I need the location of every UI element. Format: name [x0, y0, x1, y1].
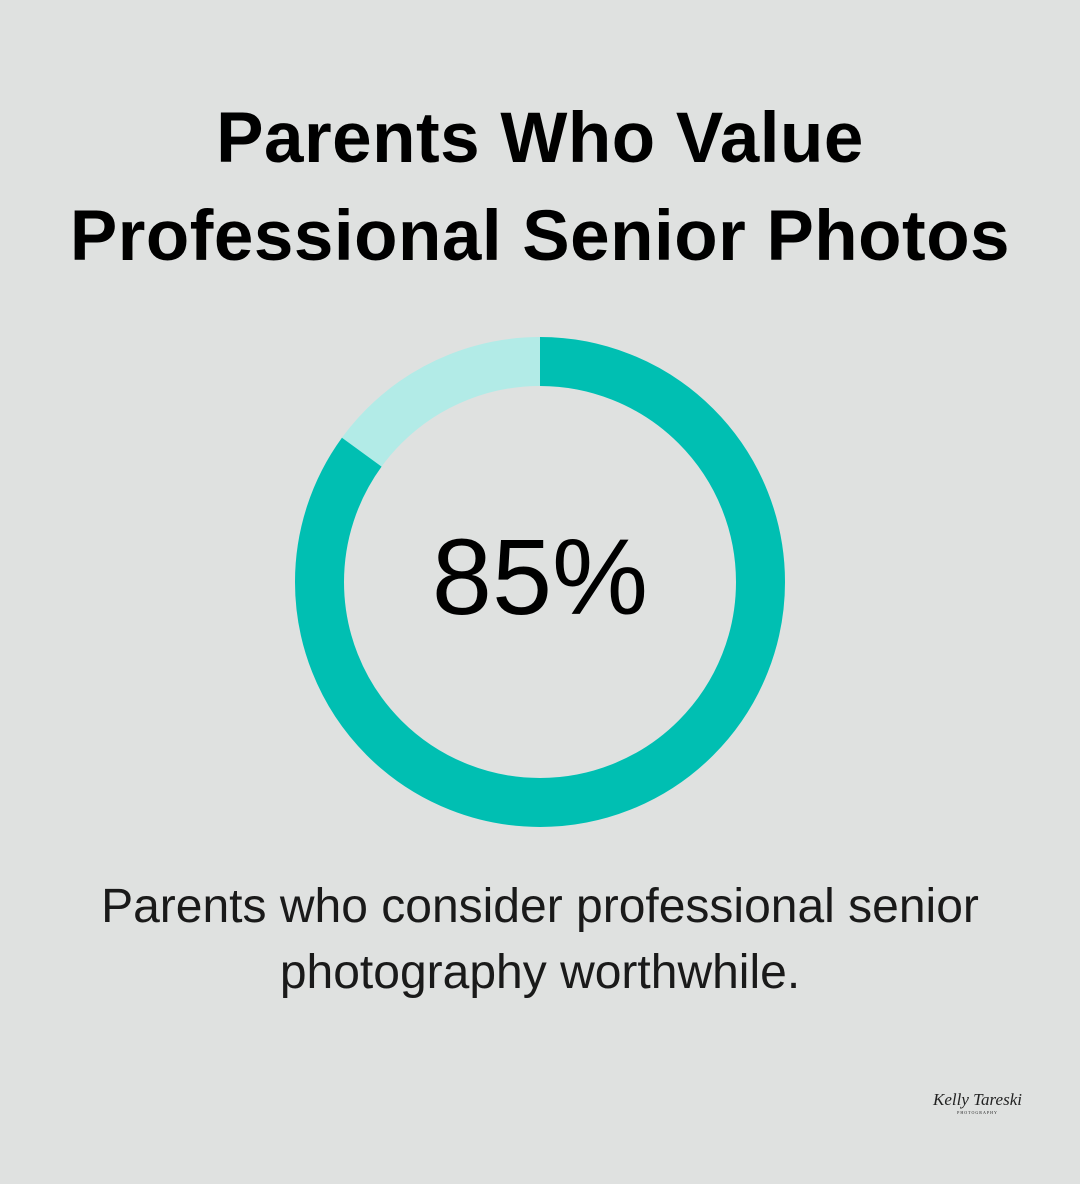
logo: Kelly Tareski: [933, 1090, 1022, 1109]
title: Professional Senior Photos: [70, 197, 1010, 276]
caption: [101, 880, 979, 999]
donut 85% segment: [320, 362, 760, 802]
logo: PHOTOGRAPHY: [957, 1110, 998, 1115]
donut remainder segment: [320, 362, 760, 802]
caption: Parents who consider professional senior: [101, 880, 979, 933]
title: [70, 99, 1010, 276]
caption: photography worthwhile.: [280, 946, 800, 999]
title: Parents Who Value: [216, 99, 864, 178]
percentage label: 85%: [432, 516, 648, 637]
